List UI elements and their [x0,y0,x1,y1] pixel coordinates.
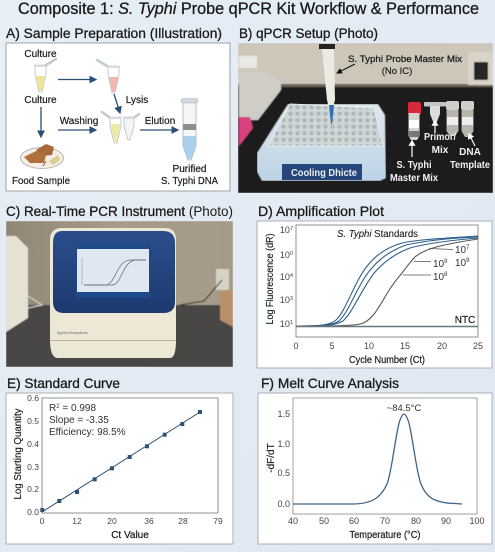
plot frame F [293,398,477,514]
labels: reagents: Template [450,160,490,171]
instrument screen [76,243,150,298]
amplification curves [296,236,478,326]
y axis title D: Log Fluorescence (dR) [265,234,276,324]
label: washing: Washing [60,116,98,127]
axis labels D: 1 [290,320,293,326]
arrow: pink tube to lysis [114,94,120,113]
panel: amplification plot [257,203,492,368]
labels: reagents: Mix [432,145,449,156]
cooling block with plate [257,104,386,181]
axis labels F: 0.0 [277,499,290,509]
axis labels F: 1.0 [277,439,290,449]
panel: sample preparation: S. Typhi DNA [161,176,218,187]
axis labels D: 10 [280,225,290,235]
statistics: Efficiency: 98.5% [49,427,126,438]
axis labels D: 5 [329,341,335,351]
axis labels E: 0.5 [27,416,39,426]
curve labels: 9 [444,259,448,265]
statistics: Slope = -3.35 [49,415,109,426]
axis labels D: 10 [280,272,290,282]
panel F background [258,393,492,544]
arrow: to pipette [337,64,355,73]
labels: reagents: DNA [459,147,481,158]
curve labels [433,245,470,283]
statistics: = 0.998 [60,403,96,414]
icon: purification column [181,98,198,160]
axis labels D: 3 [290,296,293,302]
axis labels E: 0 [40,516,45,526]
axis labels D: 7 [290,226,293,232]
y axis title E: Log Starting Quantity [13,408,24,500]
axis labels E: 0.6 [27,393,39,403]
panel: qPCR setup: (No IC) [382,66,412,77]
heading: panel E: E) Standard Curve [7,375,120,391]
arrow: culture to pink tube [58,78,96,80]
labels: reagents: S. Typhi [396,160,432,171]
y axis title F: -dF/dT [266,443,277,473]
axis labels D: 15 [400,341,410,351]
icon: yellow wash tube [102,112,122,143]
curve labels: 10 [455,258,466,269]
axis labels E: 79 [213,516,223,526]
icon: clear wash tube [123,114,139,140]
labels: reagents [390,132,490,184]
plot frame E [42,398,218,513]
melt curve [293,414,462,504]
statistics: R [49,403,56,414]
regression line and points [40,410,202,512]
icon: pipette [319,44,335,124]
curve labels: 7 [466,245,470,251]
label: probe master mix: S. Typhi Probe Master Mix [348,54,462,65]
axis labels D: 10 [280,295,290,305]
icon: grey tubes [446,101,474,137]
panel D background [257,221,492,368]
label: elution: Elution [145,116,175,127]
peak label: ~84.5°C [387,403,421,414]
arrow: culture to food sample [40,107,42,137]
panel: qPCR setup [238,25,493,193]
panel: melt curve analysis [258,375,492,544]
axis labels D: 20 [437,341,447,351]
axis labels F: 90 [441,516,451,526]
axis labels F: 100 [469,516,485,526]
label: cooling block: Cooling Dhicte [291,167,357,179]
panel: sample preparation [6,25,230,191]
axis labels D: 10 [280,250,290,260]
axis labels E: 36 [144,516,154,526]
statistics [49,403,126,438]
axis labels F: 50 [319,516,329,526]
panel E background [6,393,233,544]
arrow: elution [140,129,178,131]
axis labels D: 25 [473,341,483,351]
axis labels E [27,393,223,526]
instrument brand marks: Applied Biosystems [57,331,88,335]
labels: reagents: Master Mix [390,173,438,184]
icon: pink tube [97,60,120,93]
axis labels F: 60 [349,516,359,526]
panel: real-time PCR instrument [6,203,233,367]
x axis title E: Ct Value [111,530,149,541]
curve labels: 10 [433,272,444,283]
axis labels E: 28 [178,516,188,526]
axis labels E: 0.3 [27,462,39,472]
heading: panel D: D) Amplification Plot [258,203,384,219]
curve leader lines [403,248,453,275]
chart title D: S. Typhi Standards [337,229,418,240]
panel: standard curve [6,375,233,544]
heading: panel F: F) Melt Curve Analysis [261,375,399,391]
axis labels E: 0.2 [27,484,39,494]
curve labels: 8 [444,272,448,278]
axis labels F: 80 [411,516,421,526]
axis labels E: 0.0 [27,507,39,517]
label: culture top: Culture [24,49,57,60]
instrument body [50,228,176,358]
axis labels F: 1.5 [277,409,290,419]
photo background [6,221,233,367]
heading: panel A: A) Sample Preparation (Illustration) [6,25,222,41]
curve labels: 10 [433,259,444,270]
x axis title D: Cycle Number (Ct) [349,355,425,366]
x axis title F: Temperature (°C) [350,530,420,541]
photo: bench scene [238,43,493,193]
axis labels D: 0 [290,251,293,257]
icon: master mix tube [408,102,421,140]
axis labels F: 0.5 [277,468,290,478]
axis labels E: 12 [72,516,82,526]
axis labels D: 10 [280,319,290,329]
icon: yellow culture tube [34,59,56,92]
icon: food sample plate [20,144,64,168]
axis labels D: 4 [290,273,293,279]
arrow: washing [58,129,96,131]
label: food sample: Food Sample [12,176,70,187]
axis labels E: 0.4 [27,439,39,449]
heading: panel B: B) qPCR Setup (Photo) [239,25,378,41]
label: culture lower: Culture [24,95,57,106]
axis labels D: 0 [293,341,299,351]
heading: panel C: C) Real-Time PCR Instrument (Photo) [6,203,233,219]
axis labels D: 10 [364,341,374,351]
curve labels: 10 [455,245,466,256]
label: NTC: NTC [455,315,475,326]
axis labels F: 40 [288,516,298,526]
labels: reagents: Primor/ [424,132,456,143]
curve labels: 9 [466,258,470,264]
label: purified DNA: Purified [173,164,206,175]
panel A background [6,43,230,191]
axis labels F [277,409,485,526]
axis labels D [280,225,483,351]
statistics: 2 [56,404,60,410]
plot frame [296,225,478,337]
axis labels F: 70 [380,516,390,526]
icon: primer tube [424,102,446,124]
white arrows [412,121,475,157]
label: lysis: Lysis [126,95,148,106]
axis labels E: 20 [107,516,117,526]
